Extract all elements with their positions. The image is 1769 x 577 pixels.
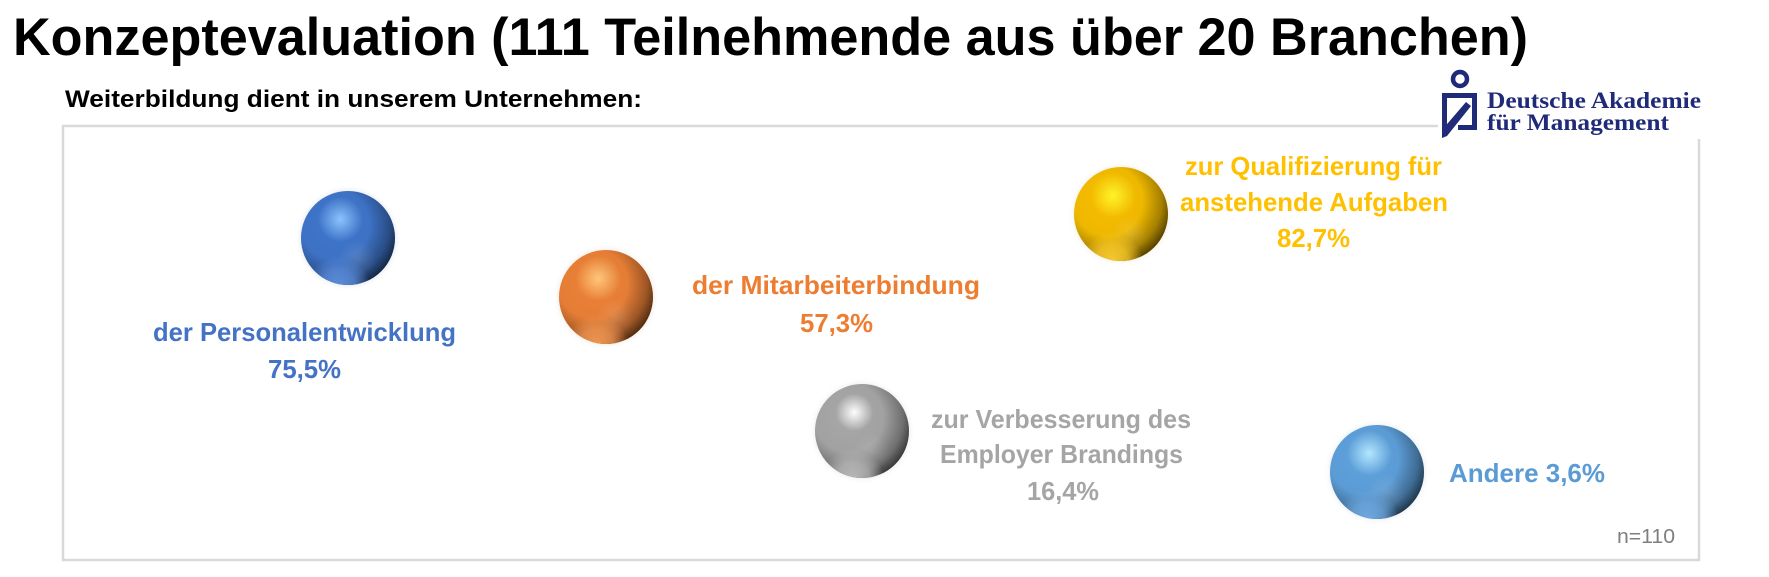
icon: gold sphere [1074, 167, 1168, 261]
icon: orange sphere [559, 250, 653, 344]
logo: Deutsche Akademie für Management [1438, 66, 1712, 139]
label: zur Verbesserung des Employer Brandings 16,4%: zur Verbesserung des [931, 404, 1191, 434]
icon: grey sphere [815, 384, 909, 478]
item: der Personalentwicklung [153, 191, 456, 384]
panel: chart frame [63, 126, 1699, 560]
icon: light blue sphere [1330, 425, 1424, 519]
label: zur Qualifizierung für anstehende Aufgaben 82,7% [1180, 151, 1448, 253]
label: zur Verbesserung des Employer Brandings 16,4%: 16,4% [1027, 476, 1099, 506]
subtitle: Weiterbildung dient in unserem Unternehmen: [65, 86, 642, 113]
label: zur Qualifizierung für anstehende Aufgaben 82,7%: anstehende Aufgaben [1180, 187, 1448, 217]
logo: Deutsche Akademie für Management: für Management [1487, 110, 1669, 135]
item: der Mitarbeiterbindung [559, 250, 980, 344]
label: der Mitarbeiterbindung 57,3% [692, 270, 980, 338]
label: zur Verbesserung des Employer Brandings 16,4%: Employer Brandings [940, 439, 1183, 469]
label: der Personalentwicklung 75,5% [153, 317, 456, 384]
sample size note: n=110 [1617, 526, 1675, 548]
label: zur Verbesserung des Employer Brandings 16,4% [931, 404, 1191, 506]
label: der Personalentwicklung 75,5%: 75,5% [268, 354, 341, 384]
label: Andere 3,6%: Andere 3,6% [1449, 458, 1605, 488]
label: der Mitarbeiterbindung 57,3%: der Mitarbeiterbindung [692, 270, 980, 300]
label: der Personalentwicklung 75,5%: der Personalentwicklung [153, 317, 456, 347]
title: Konzeptevaluation (111 Teilnehmende aus über 20 Branchen) [13, 8, 1528, 67]
label: zur Qualifizierung für anstehende Aufgaben 82,7%: zur Qualifizierung für [1185, 151, 1442, 181]
logo: Deutsche Akademie für Management: Deutsche Akademie [1487, 88, 1701, 113]
item: zur Qualifizierung für anstehende Aufgaben [1074, 151, 1448, 261]
label: der Mitarbeiterbindung 57,3%: 57,3% [800, 308, 873, 338]
label: zur Qualifizierung für anstehende Aufgaben 82,7%: 82,7% [1277, 223, 1350, 253]
item: Andere [1330, 425, 1605, 519]
icon: blue sphere [301, 191, 395, 285]
item: zur Verbesserung des Employer Brandings [815, 384, 1191, 506]
